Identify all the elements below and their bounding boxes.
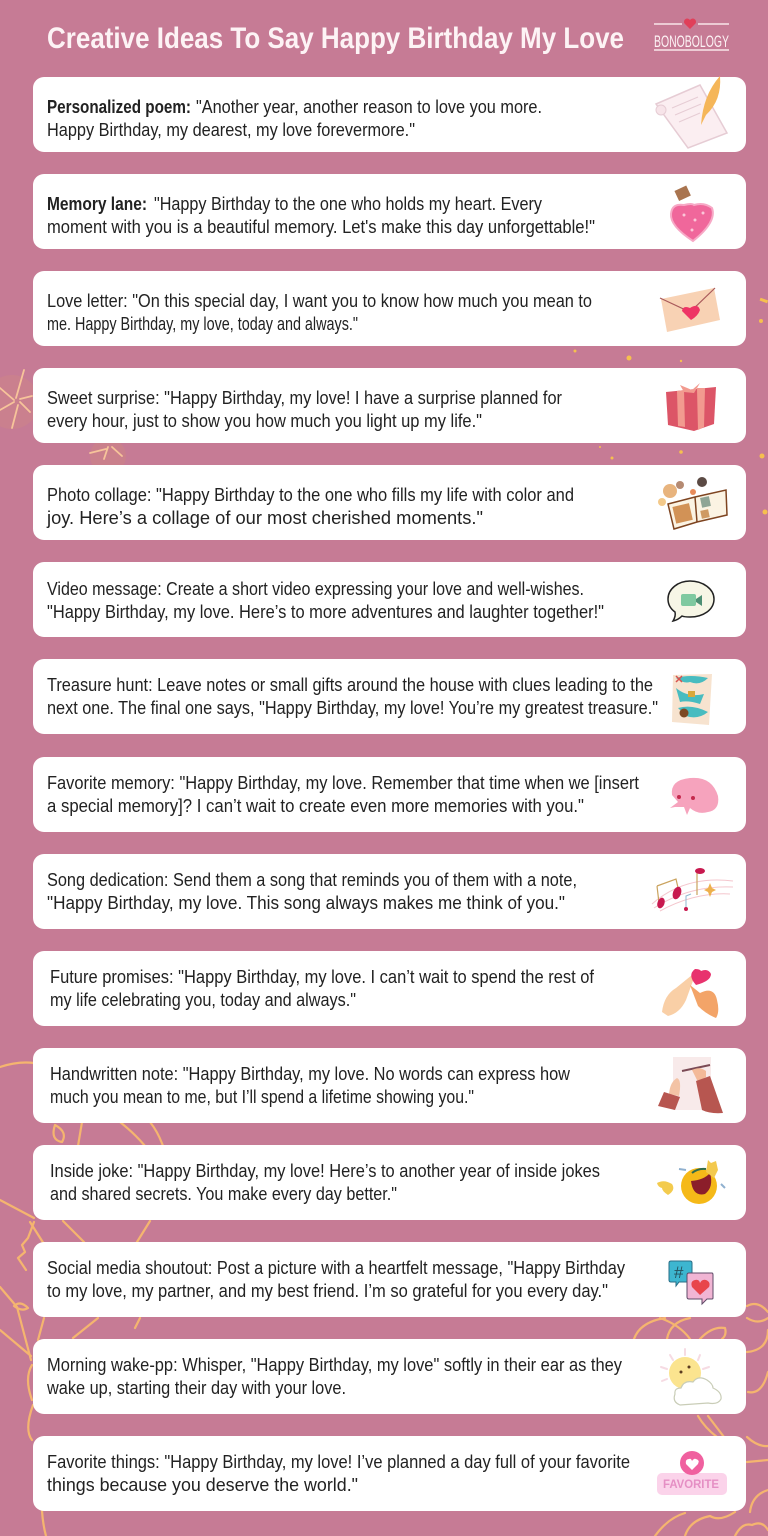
panel: morning wake-up: Morning wake-pp: Whisper, "Happy Birthday, my love" softly in their ear as they <box>47 1355 622 1375</box>
panel: future promises <box>33 951 746 1026</box>
panel: treasure hunt <box>33 659 746 734</box>
icon: favorite badge: FAVORITE <box>663 1477 719 1491</box>
panel: personalized poem: Personalized poem: <box>47 97 191 117</box>
icon: favorite badge <box>657 1451 727 1495</box>
panel: photo collage: joy. Here’s a collage of our most cherished moments." <box>46 508 483 528</box>
panel: photo collage: Photo collage: "Happy Birthday to the one who fills my life with color and <box>47 485 574 505</box>
panel: memory lane: Memory lane: <box>47 194 147 214</box>
icon: photo album <box>658 477 727 529</box>
panel: treasure hunt: Treasure hunt: Leave notes or small gifts around the house with clues leading to the <box>47 675 653 695</box>
panel: love letter <box>33 271 746 346</box>
panel: sweet surprise: Sweet surprise: "Happy Birthday, my love! I have a surprise planned for <box>47 388 562 408</box>
panel: favorite things: Favorite things: "Happy Birthday, my love! I’ve planned a day full of your favorite <box>47 1452 630 1472</box>
panel: personalized poem: "Another year, another reason to love you more. <box>196 97 542 117</box>
icon: envelope with heart <box>660 288 720 332</box>
icon: hashtag and heart bubbles: # <box>674 1263 684 1282</box>
decorative fireworks and gold dots <box>0 298 768 514</box>
panel: social media shoutout <box>33 1242 746 1317</box>
panel: morning wake-up <box>33 1339 746 1414</box>
logo: Bonobology <box>654 18 729 51</box>
panel: personalized poem <box>33 76 746 152</box>
panel: treasure hunt: next one. The final one says, "Happy Birthday, my love! You’re my greatest treasure." <box>47 698 658 718</box>
panel: video message: Video message: Create a short video expressing your love and well-wishes. <box>47 579 584 599</box>
icon: heart bottle <box>671 186 713 241</box>
panel: memory lane: moment with you is a beautiful memory. Let's make this day unforgettable!" <box>47 217 595 237</box>
panel: memory lane: "Happy Birthday to the one who holds my heart. Every <box>154 194 542 214</box>
panel: video message: "Happy Birthday, my love. Here’s to more adventures and laughter together!" <box>47 602 604 622</box>
panel: favorite things: things because you deserve the world." <box>47 1475 358 1495</box>
icon: scroll and quill <box>656 76 727 148</box>
icon: sun and cloud <box>661 1349 721 1405</box>
icon: gift box <box>666 383 716 431</box>
panel: song dedication: "Happy Birthday, my love. This song always makes me think of you." <box>47 893 565 913</box>
panel: memory lane <box>33 174 746 249</box>
panel: personalized poem: Happy Birthday, my dearest, my love forevermore." <box>47 120 415 140</box>
panel: favorite memory <box>33 757 746 832</box>
panel: handwritten note: Handwritten note: "Happy Birthday, my love. No words can express how <box>50 1064 571 1084</box>
icon: treasure map <box>672 674 712 725</box>
panel: inside joke <box>33 1145 746 1220</box>
panel: future promises: my life celebrating you, today and always." <box>50 990 356 1010</box>
panel: song dedication <box>33 854 746 929</box>
panel: morning wake-up: wake up, starting their day with your love. <box>46 1378 346 1398</box>
panel: sweet surprise: every hour, just to show you how much you light up my life." <box>47 411 482 431</box>
panel: social media shoutout: to my love, my partner, and my best friend. I’m so grateful for you every day." <box>47 1281 608 1301</box>
icon: video speech bubble <box>668 581 714 621</box>
icon: hashtag and heart bubbles <box>669 1261 713 1304</box>
panel: song dedication: Song dedication: Send them a song that reminds you of them with a note, <box>47 870 577 890</box>
icon: laughing emoji <box>657 1160 725 1204</box>
icon: pinky promise hands <box>662 969 718 1018</box>
decorative orange line art, lower area <box>0 1062 768 1536</box>
panel: love letter: Love letter: "On this special day, I want you to know how much you mean to <box>47 291 592 311</box>
panel: photo collage <box>33 465 746 540</box>
panel: favorite memory: Favorite memory: "Happy Birthday, my love. Remember that time when we [insert <box>47 773 639 793</box>
panel: inside joke: Inside joke: "Happy Birthday, my love! Here’s to another year of inside jokes <box>50 1161 600 1181</box>
panel: love letter: me. Happy Birthday, my love, today and always." <box>47 314 358 334</box>
icon: music notes <box>652 868 733 911</box>
panel: social media shoutout: Social media shoutout: Post a picture with a heartfelt message, "Happy Birthday <box>47 1258 625 1278</box>
icon: hands writing <box>658 1057 723 1113</box>
panel: future promises: Future promises: "Happy Birthday, my love. I can’t wait to spend the rest of <box>50 967 595 987</box>
icon: pink brain <box>670 778 718 815</box>
panel: favorite things <box>33 1436 746 1511</box>
panel: inside joke: and shared secrets. You make every day better." <box>50 1184 397 1204</box>
title: Creative Ideas To Say Happy Birthday My Love <box>47 22 624 55</box>
panel: favorite memory: a special memory]? I can’t wait to create even more memories with you." <box>47 796 584 816</box>
panel: handwritten note: much you mean to me, but I’ll spend a lifetime showing you." <box>50 1087 474 1107</box>
panel: sweet surprise <box>33 368 746 443</box>
panel: handwritten note <box>33 1048 746 1123</box>
panel: video message <box>33 562 746 637</box>
